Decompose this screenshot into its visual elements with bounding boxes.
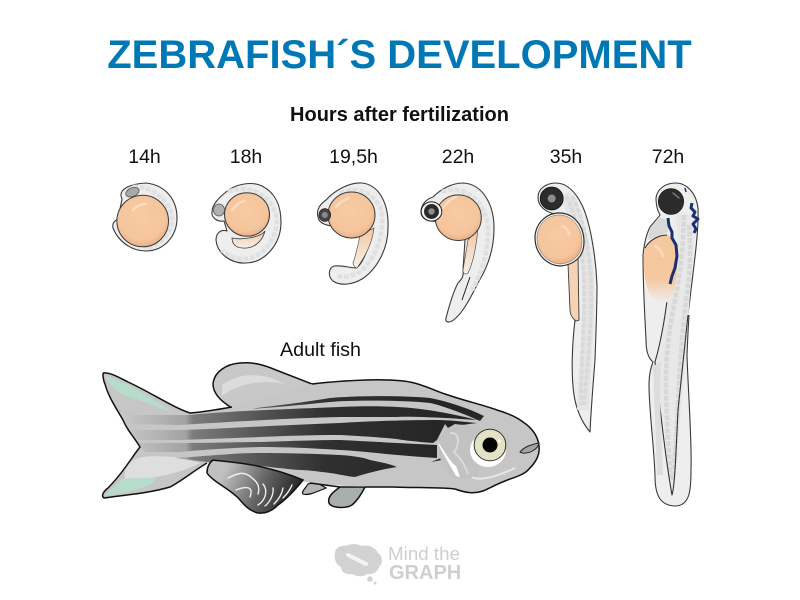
label: 22h: 22h xyxy=(442,146,474,168)
embryo: 14h xyxy=(113,183,177,251)
wordmark: Mind the: Mind the xyxy=(388,543,460,564)
label: 19,5h: 19,5h xyxy=(329,146,378,168)
tail highlight xyxy=(125,456,200,478)
embryo: 35h xyxy=(535,183,597,432)
subtitle: hours after fertilization: Hours after fertilization xyxy=(290,104,509,126)
label: 14h: 14h xyxy=(128,146,161,168)
yolk xyxy=(328,192,375,238)
adult fish xyxy=(103,363,539,513)
eye xyxy=(124,186,140,199)
embryo: 72h xyxy=(643,183,698,506)
embryo: 22h xyxy=(421,183,494,322)
logo: Mind the Graph xyxy=(335,543,461,584)
stripes xyxy=(123,396,484,477)
body and tail xyxy=(103,373,539,498)
icon: brain with pencil xyxy=(335,544,382,584)
yolk extension xyxy=(568,256,579,321)
embryo: 19,5h xyxy=(317,183,388,284)
label: 35h: 35h xyxy=(550,146,582,168)
eye xyxy=(319,209,331,221)
yolk xyxy=(644,235,677,302)
yolk xyxy=(435,195,481,240)
title: ZEBRAFISH´S DEVELOPMENT xyxy=(107,33,692,77)
yolk xyxy=(117,195,168,247)
fin: small ventral xyxy=(329,487,365,507)
yolk extension xyxy=(232,231,265,248)
head: gill cover xyxy=(437,425,515,479)
eye xyxy=(658,188,684,214)
fin: anal stub xyxy=(302,482,326,495)
eye xyxy=(470,429,506,467)
yolk extension xyxy=(463,228,478,274)
wordmark: GRAPH: GRAPH xyxy=(389,562,461,584)
eye xyxy=(540,187,563,210)
yolk xyxy=(224,193,270,236)
body outline xyxy=(103,373,539,498)
trunk xyxy=(655,212,695,495)
label: 18h: 18h xyxy=(230,146,262,168)
eye xyxy=(421,202,442,221)
label: 72h: 72h xyxy=(652,146,684,168)
yolk extension xyxy=(353,228,374,268)
fin: dorsal xyxy=(213,363,312,408)
yolk xyxy=(535,213,584,266)
mouth xyxy=(520,443,539,453)
label: adult fish: Adult fish xyxy=(280,339,361,361)
eye xyxy=(214,204,224,216)
somites xyxy=(564,195,591,410)
tail tips xyxy=(105,376,172,496)
melanophores xyxy=(668,188,698,284)
fin: pectoral xyxy=(207,460,303,513)
embryo: 18h xyxy=(212,184,281,263)
